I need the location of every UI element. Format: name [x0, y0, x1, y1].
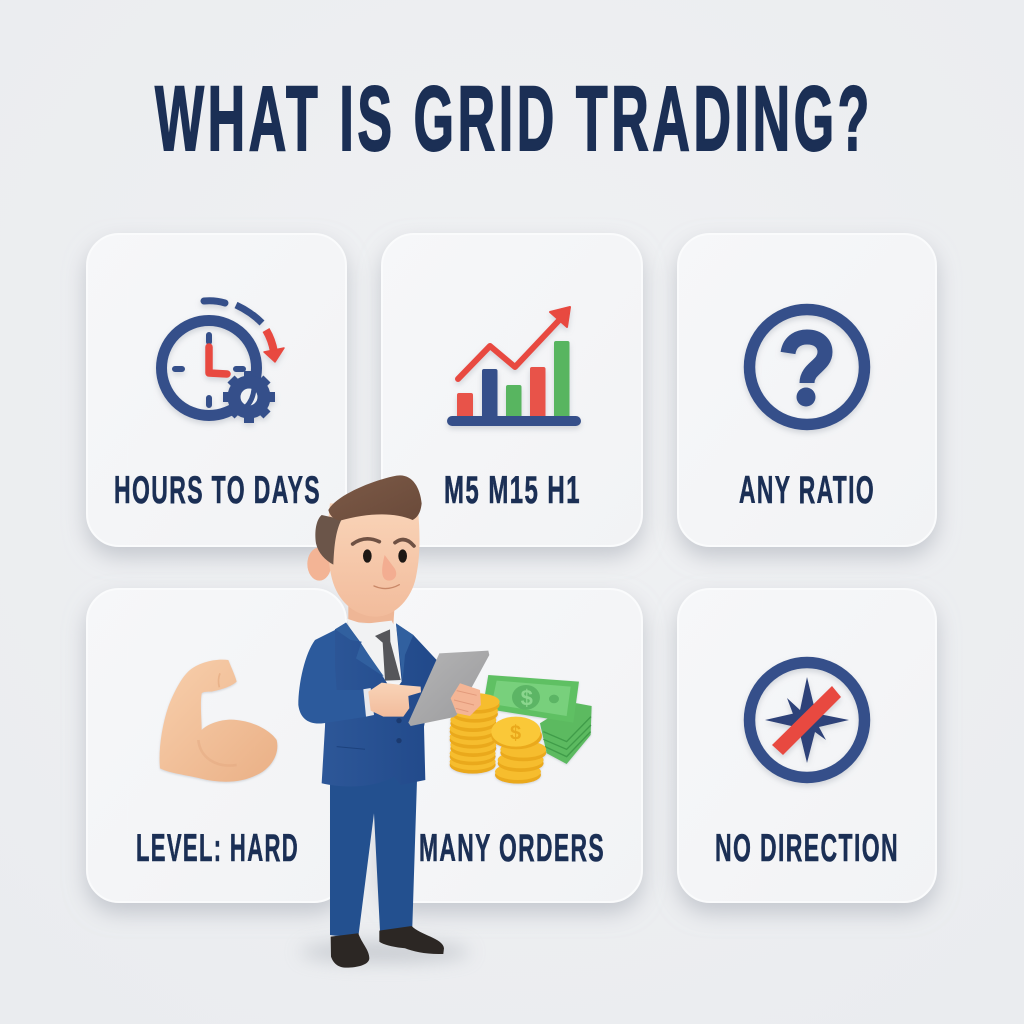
left arm: [298, 630, 367, 724]
panel: many orders: [382, 589, 642, 902]
jacket: [322, 623, 437, 786]
label: LEVEL: HARD: [136, 827, 299, 870]
pointing hand: [368, 683, 421, 717]
ear: [307, 547, 331, 581]
panel: no direction: [678, 589, 936, 902]
label: MANY ORDERS: [419, 827, 605, 870]
icon: crossed compass: [750, 662, 864, 778]
tablet: [408, 651, 489, 726]
cuff: [363, 688, 374, 717]
panel: hours to days: [87, 234, 346, 546]
label: M5 M15 H1: [444, 469, 581, 512]
icon: flexed arm: [160, 660, 277, 782]
nose: [382, 555, 396, 581]
shirt: [346, 618, 404, 683]
panel: timeframes: [382, 234, 642, 546]
shoes: [331, 926, 444, 968]
icon: coins and cash: $: [521, 686, 533, 711]
character: businessman with tablet: [298, 475, 489, 968]
icon: coins and cash: [450, 675, 592, 784]
panel: any ratio: [678, 234, 936, 546]
icon: bar chart with arrow: [447, 307, 581, 426]
trousers: [330, 770, 417, 936]
eyebrows: [353, 539, 414, 546]
quiff hair: [328, 475, 422, 521]
mouth: [374, 585, 399, 589]
icon: clock with gear: [162, 301, 284, 423]
icon: question mark: [750, 310, 864, 424]
label: ANY RATIO: [739, 469, 875, 512]
side hair: [315, 515, 342, 565]
holding hand: [451, 683, 481, 716]
label: HOURS TO DAYS: [114, 469, 321, 512]
head: [328, 503, 420, 617]
icon: coins and cash: $: [510, 722, 521, 744]
label: NO DIRECTION: [715, 827, 899, 870]
neck: [348, 600, 395, 625]
eyes: [363, 549, 372, 563]
tie: [375, 629, 401, 681]
panel: level hard: [87, 589, 346, 902]
